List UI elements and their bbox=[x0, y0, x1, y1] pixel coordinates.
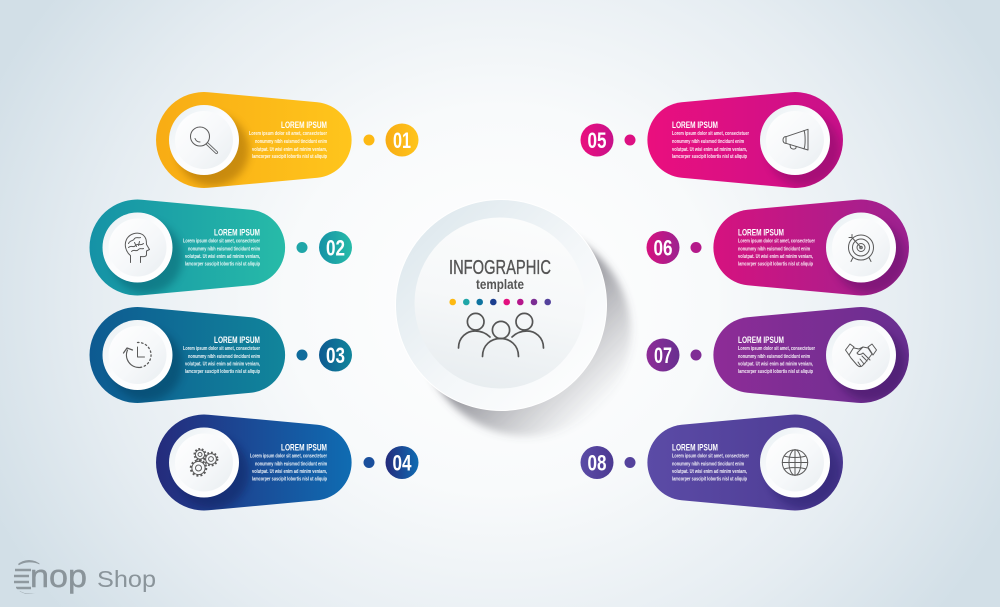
pill bbox=[647, 414, 843, 510]
pill shadow bbox=[177, 436, 249, 508]
connector dot bbox=[364, 457, 374, 468]
pill shadow bbox=[177, 114, 249, 186]
text block bbox=[738, 335, 816, 375]
inner disc bbox=[175, 111, 233, 169]
pill bbox=[156, 92, 352, 188]
panel: step 04 bbox=[156, 414, 418, 510]
panel: step 08 bbox=[580, 414, 843, 510]
inner disc bbox=[832, 326, 890, 384]
subheading: template: template bbox=[476, 276, 524, 292]
text block: lamcorper suscipit lobortis nisl ut aliquip bbox=[185, 369, 261, 375]
text block: LOREM IPSUM bbox=[738, 335, 784, 346]
pill shadow bbox=[110, 329, 182, 401]
pill bbox=[713, 200, 909, 296]
text block: LOREM IPSUM bbox=[738, 228, 784, 238]
panel: step 06 bbox=[646, 200, 909, 296]
text block: LOREM IPSUM bbox=[672, 442, 718, 454]
text block bbox=[672, 120, 750, 160]
number 07 bbox=[646, 338, 680, 372]
text block: LOREM IPSUM bbox=[214, 228, 260, 238]
number 01: 01 bbox=[393, 128, 411, 153]
icon: megaphone bbox=[783, 129, 808, 150]
inner disc bbox=[175, 434, 233, 492]
icon: gears bbox=[191, 449, 218, 476]
white circle bbox=[102, 320, 172, 390]
panel: step 05 bbox=[580, 92, 843, 188]
panel: step 03 bbox=[90, 307, 352, 403]
pill bbox=[156, 414, 352, 510]
white circle bbox=[826, 212, 896, 282]
text block: LOREM IPSUM bbox=[281, 120, 327, 131]
number 06 bbox=[646, 231, 680, 264]
text block: lamcorper suscipit lobortis nisl ut aliquip bbox=[672, 154, 748, 160]
text block: nonummy nibh euismod tincidunt enim bbox=[672, 139, 744, 145]
text block: Lorem ipsum dolor sit amet, consectetuer bbox=[672, 131, 750, 137]
text block: Lorem ipsum dolor sit amet, consectetuer bbox=[183, 238, 261, 244]
text block: lamcorper suscipit lobortis nisl ut aliquip bbox=[252, 476, 328, 482]
text block: volutpat. Ut wisi enim ad minim veniam, bbox=[185, 254, 260, 260]
panel: step 01 bbox=[156, 92, 418, 188]
text block: volutpat. Ut wisi enim ad minim veniam, bbox=[252, 469, 327, 475]
white circle bbox=[169, 105, 239, 175]
number 05: 05 bbox=[588, 128, 606, 153]
inner disc bbox=[766, 111, 824, 169]
connector dot bbox=[690, 350, 702, 360]
white circle bbox=[760, 428, 830, 498]
text block: nonummy nibh euismod tincidunt enim bbox=[188, 246, 260, 252]
inner disc bbox=[108, 218, 166, 276]
text block: LOREM IPSUM bbox=[214, 335, 260, 346]
text block: nonummy nibh euismod tincidunt enim bbox=[672, 462, 744, 468]
icon: people bbox=[458, 313, 544, 356]
logo: nop Shop bbox=[14, 558, 156, 595]
number 04: 04 bbox=[392, 450, 412, 476]
logo mark bbox=[14, 561, 40, 595]
text block bbox=[183, 335, 261, 375]
text block: nonummy nibh euismod tincidunt enim bbox=[738, 354, 810, 360]
connector dot bbox=[296, 242, 308, 253]
icon: clock bbox=[124, 342, 151, 368]
number 02: 02 bbox=[326, 236, 345, 260]
connector dot bbox=[624, 134, 636, 146]
number 02 bbox=[319, 231, 352, 264]
panel: step 07 bbox=[646, 307, 909, 403]
text block: Lorem ipsum dolor sit amet, consectetuer bbox=[183, 346, 261, 352]
inner disc bbox=[108, 326, 166, 384]
inner disc bbox=[766, 434, 824, 492]
white circle bbox=[826, 320, 896, 390]
text block bbox=[672, 442, 750, 482]
pill shadow bbox=[834, 329, 906, 401]
connector dot bbox=[690, 242, 702, 253]
text block: lamcorper suscipit lobortis nisl ut aliquip bbox=[185, 262, 261, 268]
text block: nonummy nibh euismod tincidunt enim bbox=[188, 354, 260, 360]
number 03 bbox=[319, 338, 352, 372]
text block bbox=[250, 442, 328, 482]
text block: LOREM IPSUM bbox=[281, 442, 327, 454]
text block: volutpat. Ut wisi enim ad minim veniam, bbox=[185, 362, 260, 368]
central circle shadow bbox=[423, 228, 631, 436]
text block: volutpat. Ut wisi enim ad minim veniam, bbox=[738, 362, 813, 368]
text block: volutpat. Ut wisi enim ad minim veniam, bbox=[738, 254, 813, 260]
text block bbox=[183, 228, 261, 268]
connector dot bbox=[364, 134, 374, 146]
number 06: 06 bbox=[654, 236, 672, 260]
central circle outer ring bbox=[396, 200, 606, 410]
text block: LOREM IPSUM bbox=[672, 120, 718, 131]
number 04 bbox=[386, 446, 418, 479]
pill bbox=[713, 307, 909, 403]
icon: handshake bbox=[846, 344, 876, 367]
inner disc bbox=[832, 218, 890, 276]
panel: step 02 bbox=[90, 200, 352, 296]
logo wordmark: nop bbox=[30, 558, 87, 594]
white circle bbox=[169, 428, 239, 498]
text block: lamcorper suscipit lobortis nisl ut aliquip bbox=[672, 476, 748, 482]
text block bbox=[249, 120, 328, 160]
text block: nonummy nibh euismod tincidunt enim bbox=[255, 139, 327, 145]
pill shadow bbox=[768, 436, 840, 508]
pill shadow bbox=[110, 222, 182, 294]
number 03: 03 bbox=[326, 343, 345, 368]
pill bbox=[90, 200, 285, 296]
text block: Lorem ipsum dolor sit amet, consectetuer bbox=[249, 131, 328, 137]
white circle bbox=[102, 212, 172, 282]
text block bbox=[738, 228, 816, 268]
text block: volutpat. Ut wisi enim ad minim veniam, bbox=[672, 147, 747, 153]
number 07: 07 bbox=[654, 343, 672, 368]
icon: brain head bbox=[125, 233, 150, 262]
pill bbox=[647, 92, 843, 188]
white circle bbox=[760, 105, 830, 175]
icon: globe bbox=[782, 450, 808, 475]
icon: magnifier bbox=[190, 127, 216, 152]
text block: Lorem ipsum dolor sit amet, consectetuer bbox=[738, 238, 816, 244]
panel: central circle bbox=[396, 200, 631, 436]
text block: nonummy nibh euismod tincidunt enim bbox=[738, 246, 810, 252]
colour dots bbox=[449, 299, 551, 305]
logo shop text: Shop bbox=[97, 566, 156, 592]
number 05 bbox=[580, 124, 614, 156]
text block: volutpat. Ut wisi enim ad minim veniam, bbox=[672, 469, 747, 475]
central circle inner disc bbox=[414, 218, 586, 388]
text block: lamcorper suscipit lobortis nisl ut aliquip bbox=[738, 369, 814, 375]
connector dot bbox=[624, 457, 636, 468]
heading: infographic: INFOGRAPHIC bbox=[449, 257, 551, 279]
text block: Lorem ipsum dolor sit amet, consectetuer bbox=[672, 454, 750, 460]
number 08 bbox=[580, 446, 614, 479]
text block: volutpat. Ut wisi enim ad minim veniam, bbox=[252, 147, 327, 153]
text block: lamcorper suscipit lobortis nisl ut aliquip bbox=[252, 154, 328, 160]
text block: Lorem ipsum dolor sit amet, consectetuer bbox=[250, 454, 328, 460]
connector dot bbox=[296, 350, 308, 360]
pill bbox=[90, 307, 285, 403]
pill shadow bbox=[834, 222, 906, 294]
icon: target bbox=[848, 234, 874, 262]
text block: lamcorper suscipit lobortis nisl ut aliquip bbox=[738, 262, 814, 268]
text block: nonummy nibh euismod tincidunt enim bbox=[255, 462, 327, 468]
text block: Lorem ipsum dolor sit amet, consectetuer bbox=[738, 346, 816, 352]
pill shadow bbox=[768, 114, 840, 186]
number 01 bbox=[386, 124, 418, 156]
number 08: 08 bbox=[588, 450, 606, 476]
